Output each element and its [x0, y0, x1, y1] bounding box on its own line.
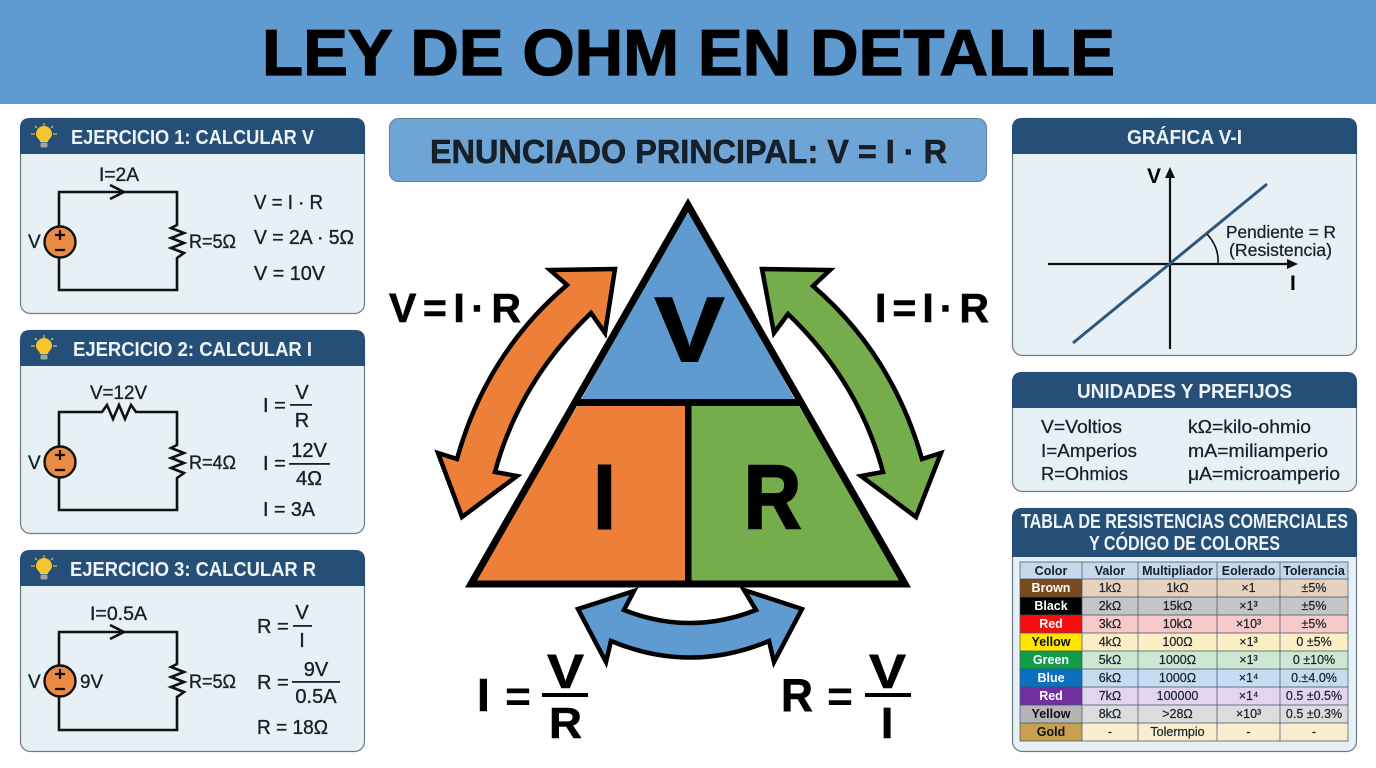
header banner — [0, 0, 1376, 104]
units list: kΩ=kilo-ohmio — [1188, 416, 1311, 437]
circuit 3: 9V — [80, 672, 103, 693]
color code table: 1kΩ — [1099, 581, 1121, 595]
formula: R = V / I: = — [827, 672, 853, 721]
formulas 2 — [263, 382, 330, 521]
circuit 2 — [28, 383, 236, 510]
formulas 2: 4Ω — [296, 468, 322, 490]
color code table: 1000Ω — [1159, 653, 1196, 667]
banner: enunciado principal: ENUNCIADO PRINCIPAL: V = I · R — [430, 133, 947, 170]
line chart: V — [1147, 165, 1161, 188]
color code table: 8kΩ — [1099, 707, 1121, 721]
formula: R = V / I: I — [881, 699, 893, 748]
circuit 3 — [28, 604, 236, 730]
formula: I = V / R — [477, 646, 588, 748]
formula: I = V / R: R — [549, 699, 582, 748]
line chart: I — [1290, 272, 1296, 295]
panel: ejercicio 3 — [20, 550, 365, 752]
arrow: blue double arrow — [578, 590, 802, 662]
line chart: Pendiente = R — [1226, 222, 1336, 242]
formula: V=I·R: V=I·R — [389, 285, 521, 331]
circuit 2: V — [28, 453, 41, 474]
color code table: 0.±4.0% — [1291, 671, 1337, 685]
formula triangle — [471, 205, 905, 584]
arrow: green double arrow — [762, 269, 941, 517]
formulas 3: V — [295, 602, 309, 624]
banner: enunciado principal — [390, 118, 986, 182]
formula: I = V / R: V — [547, 646, 584, 699]
line chart: (Resistencia) — [1229, 240, 1332, 260]
heading: EJERCICIO 2: CALCULAR I — [73, 339, 312, 361]
circuit 1: I=2A — [99, 165, 139, 186]
heading: Y CÓDIGO DE COLORES — [1089, 531, 1280, 555]
formula: I = V / R: = — [505, 672, 531, 721]
color code table: ×1⁴ — [1239, 689, 1258, 703]
color code table: ±5% — [1302, 617, 1326, 631]
color code table: >28Ω — [1162, 707, 1193, 721]
color code table: Valor — [1095, 564, 1125, 578]
formulas 2: I = — [263, 395, 286, 417]
circuit 2: V=12V — [90, 383, 147, 404]
units list: I=Amperios — [1041, 440, 1137, 461]
units list: μA=microamperio — [1188, 463, 1340, 484]
color code table: 1000Ω — [1159, 671, 1196, 685]
color code table: ×10³ — [1236, 707, 1261, 721]
color code table: Gold — [1037, 725, 1065, 739]
formula: I=I·R: I=I·R — [875, 285, 989, 331]
heading: EJERCICIO 1: CALCULAR V — [71, 127, 315, 149]
color code table: 1kΩ — [1166, 581, 1189, 595]
circuit 3: R=5Ω — [189, 672, 236, 693]
circuit 2: R=4Ω — [189, 453, 236, 474]
formulas 3: R = — [257, 616, 289, 638]
letter I: I — [594, 448, 615, 548]
color code table: 6kΩ — [1099, 671, 1121, 685]
formula: R = V / I — [781, 646, 911, 748]
panel: ejercicio 1 — [20, 118, 365, 314]
color code table: Multipliador — [1142, 564, 1213, 578]
formula: I = V / R: I — [477, 669, 490, 721]
formulas 1: V = I · R — [254, 192, 323, 214]
color code table: 10kΩ — [1163, 617, 1192, 631]
color code table: 100000 — [1157, 689, 1198, 703]
circuit 3: I=0.5A — [90, 604, 147, 625]
color code table: Red — [1039, 617, 1063, 631]
color code table: 0.5 ±0.3% — [1286, 707, 1342, 721]
icon: light bulb — [31, 335, 57, 360]
color code table: Color — [1035, 564, 1067, 578]
formula: R = V / I: V — [869, 646, 906, 699]
color code table: 0 ±10% — [1293, 653, 1335, 667]
heading — [1021, 511, 1348, 555]
color code table: 2kΩ — [1099, 599, 1121, 613]
color code table: 0 ±5% — [1296, 635, 1332, 649]
color code table: 7kΩ — [1099, 689, 1121, 703]
units list: mA=miliamperio — [1188, 440, 1328, 461]
formulas 2: R — [295, 410, 309, 432]
circuit 1 — [28, 165, 236, 290]
formulas 3: I — [299, 630, 305, 652]
arrow: orange double arrow — [438, 269, 615, 517]
panel: unidades y prefijos — [1012, 372, 1357, 492]
icon: light bulb — [31, 555, 57, 580]
circuit 1: V — [28, 232, 41, 253]
formulas 3: 0.5A — [295, 686, 337, 708]
color code table: Brown — [1032, 581, 1070, 595]
color code table: Yellow — [1032, 707, 1071, 721]
formulas 2: I = 3A — [263, 499, 316, 521]
formulas 2: V — [295, 382, 309, 404]
color code table: ±5% — [1302, 599, 1326, 613]
heading: EJERCICIO 3: CALCULAR R — [70, 559, 317, 581]
color code table: Tolerancia — [1283, 564, 1346, 578]
panel: tabla de resistencias — [1012, 508, 1357, 752]
color code table: ×1⁴ — [1239, 671, 1258, 685]
formulas 3: R = 18Ω — [257, 717, 328, 739]
line chart — [1048, 165, 1336, 349]
color code table: - — [1108, 725, 1112, 739]
color code table: 5kΩ — [1099, 653, 1121, 667]
color code table: Tolermpio — [1150, 725, 1205, 739]
formula: R = V / I: R — [781, 669, 813, 721]
color code table: ×1³ — [1239, 635, 1258, 649]
color code table: Black — [1034, 599, 1068, 613]
formulas 1: V = 2A · 5Ω — [254, 227, 354, 249]
color code table: Red — [1039, 689, 1063, 703]
color code table: 100Ω — [1162, 635, 1193, 649]
formulas 1 — [254, 192, 354, 285]
heading: GRÁFICA V-I — [1127, 126, 1242, 149]
color code table: Blue — [1037, 671, 1065, 685]
circuit 1: R=5Ω — [189, 232, 236, 253]
circuit 3: V — [28, 672, 41, 693]
units list: R=Ohmios — [1041, 463, 1128, 484]
color code table: Yellow — [1032, 635, 1071, 649]
units list — [1041, 416, 1340, 484]
color code table: 15kΩ — [1163, 599, 1192, 613]
color code table: ×10³ — [1236, 617, 1261, 631]
color code table: Eolerado — [1222, 564, 1276, 578]
heading: UNIDADES Y PREFIJOS — [1077, 381, 1292, 403]
color code table: 3kΩ — [1099, 617, 1121, 631]
color code table: ±5% — [1302, 581, 1326, 595]
letter V: V — [655, 280, 724, 381]
color code table — [1020, 562, 1348, 741]
formulas 3: R = — [257, 672, 289, 694]
color code table: ×1³ — [1239, 599, 1258, 613]
color code table: 4kΩ — [1099, 635, 1121, 649]
icon: light bulb — [31, 123, 57, 148]
formulas 3: 9V — [304, 659, 329, 681]
letter R: R — [744, 448, 801, 548]
formulas 1: V = 10V — [254, 263, 326, 285]
panel: ejercicio 2 — [20, 330, 365, 534]
color code table: 0.5 ±0.5% — [1286, 689, 1342, 703]
color code table: - — [1312, 725, 1316, 739]
formulas 2: 12V — [291, 440, 327, 462]
formulas 2: I = — [263, 453, 286, 475]
color code table: ×1³ — [1239, 653, 1258, 667]
panel: gráfica V-I — [1012, 118, 1357, 356]
color code table: Green — [1033, 653, 1069, 667]
color code table: ×1 — [1241, 581, 1256, 595]
title: LEY DE OHM EN DETALLE — [262, 16, 1115, 89]
color code table: - — [1246, 725, 1251, 739]
formulas 3 — [257, 602, 340, 739]
units list: V=Voltios — [1041, 416, 1122, 437]
